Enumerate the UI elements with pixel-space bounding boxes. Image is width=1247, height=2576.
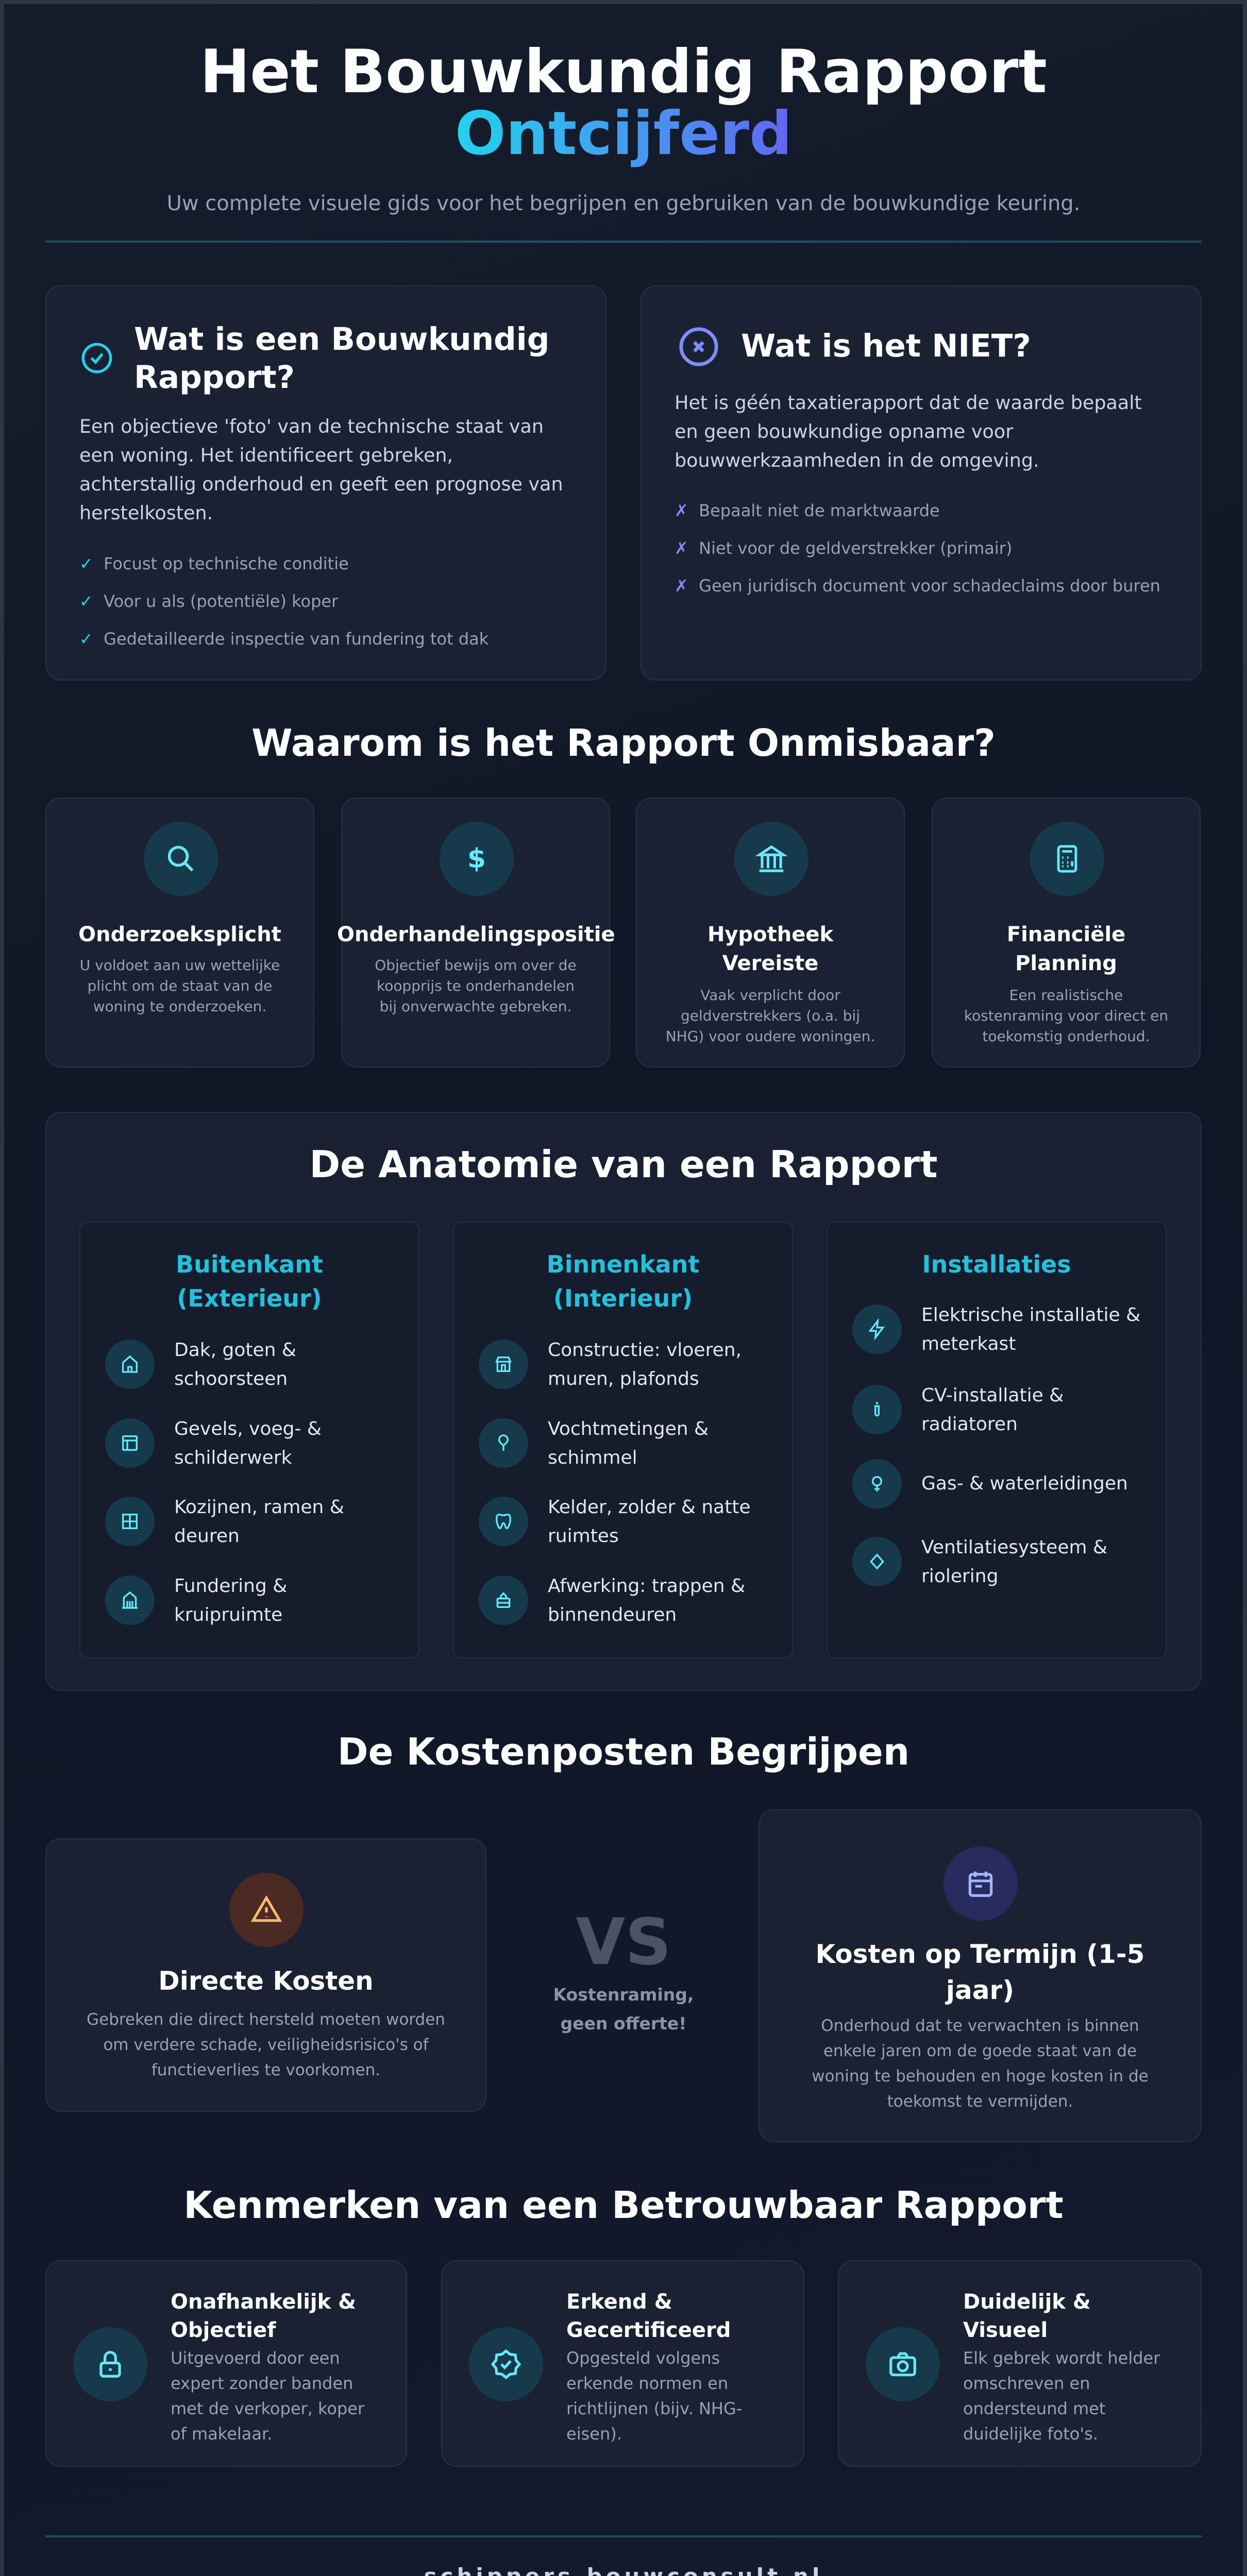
card: hypotheek: Hypotheek xyxy=(707,923,833,946)
cross list xyxy=(675,501,1160,596)
item: elektra: meterkast xyxy=(921,1333,1016,1354)
heading: kostenposten: De Kostenposten Begrijpen xyxy=(338,1730,909,1773)
body text: Een objectieve 'foto' van de technische staat van een woning. Het identificeert gebreken, achterstallig onderhoud en geeft een prognose van herstelkosten. xyxy=(79,415,563,524)
item: constructie: Constructie: vloeren, xyxy=(548,1340,742,1361)
icon: dollar: $ xyxy=(467,843,486,874)
card: financiele planning: Financiële xyxy=(1007,923,1125,946)
column: binnenkant: (Interieur) xyxy=(553,1284,693,1312)
icon: bank xyxy=(734,822,808,896)
item: gevels: Gevels, voeg- & xyxy=(174,1418,322,1439)
item: afwerking: binnendeuren xyxy=(548,1604,677,1625)
column: installaties: Installaties xyxy=(922,1250,1071,1278)
item: afwerking xyxy=(479,1575,745,1625)
card: onafhankelijk: Objectief xyxy=(171,2318,276,2342)
icon: badge check xyxy=(469,2327,543,2401)
heading: De Anatomie van een Rapport xyxy=(309,1143,938,1186)
item: dak xyxy=(105,1340,296,1389)
body text: Het is géén taxatierapport dat de waarde bepaalt en geen bouwkundige opname voor bouwwerkzaamheden in de omgeving. xyxy=(675,392,1142,471)
item: vocht: schimmel xyxy=(548,1447,637,1468)
item: kelder: ruimtes xyxy=(548,1526,619,1547)
heading: Wat is een Bouwkundig xyxy=(134,321,549,358)
cross list: ✗ Bepaalt niet de marktwaarde xyxy=(675,501,940,520)
heading: Wat is het NIET? xyxy=(741,328,1031,364)
item: kozijnen: Kozijnen, ramen & xyxy=(174,1497,344,1518)
vs callout: Kostenraming, xyxy=(553,1985,694,2005)
item: kelder xyxy=(479,1497,751,1547)
cross list: ✗ Niet voor de geldverstrekker (primair) xyxy=(675,538,1012,558)
card: financiele planning: Een realistische kostenraming voor direct en toekomstig onderhoud. xyxy=(964,987,1168,1045)
item: ventilatie: riolering xyxy=(921,1566,998,1587)
heading xyxy=(134,321,549,396)
vs callout xyxy=(553,1905,694,2033)
item: fundering xyxy=(105,1575,287,1625)
panel: wat is het niet xyxy=(641,285,1202,681)
icon: dollar xyxy=(440,822,514,896)
item: dak: Dak, goten & xyxy=(174,1340,296,1361)
item: ventilatie xyxy=(852,1537,1107,1587)
checklist: ✓ Voor u als (potentiële) koper xyxy=(79,591,338,611)
item: kozijnen: deuren xyxy=(174,1526,240,1547)
icon: camera xyxy=(866,2327,940,2401)
column: binnenkant xyxy=(453,1222,793,1658)
card: onderzoeksplicht xyxy=(45,798,314,1067)
card: hypotheek: Vaak verplicht door geldverstrekkers (o.a. bij NHG) voor oudere woningen. xyxy=(666,987,875,1045)
icon: search xyxy=(144,822,218,896)
card: onderhandelingspositie: Objectief bewijs om over de koopprijs te onderhandelen bij onverwachte gebreken. xyxy=(375,957,577,1015)
title: Ontcijferd xyxy=(455,99,792,168)
icon: calculator xyxy=(1030,822,1104,896)
subtitle: Uw complete visuele gids voor het begrijpen en gebruiken van de bouwkundige keuring. xyxy=(167,192,1080,215)
icon: x circle xyxy=(679,327,718,366)
column: buitenkant xyxy=(79,1222,419,1658)
item: gevels xyxy=(105,1418,322,1468)
panel: reasons xyxy=(45,798,1201,1067)
card: hypotheek: Vereiste xyxy=(722,952,818,975)
card: directe kosten xyxy=(45,1838,486,2112)
item: dak: schoorsteen xyxy=(174,1368,288,1389)
item: fundering: Fundering & xyxy=(174,1575,287,1597)
item: vocht: Vochtmetingen & xyxy=(548,1418,709,1439)
item: kelder: Kelder, zolder & natte xyxy=(548,1497,751,1518)
card: duidelijk: Duidelijk & xyxy=(963,2290,1091,2314)
card: onafhankelijk: Onafhankelijk & xyxy=(171,2290,356,2314)
column: buitenkant: Buitenkant xyxy=(176,1250,323,1278)
card: financiele planning: Planning xyxy=(1015,952,1117,975)
item: vocht xyxy=(479,1418,709,1468)
card: directe kosten: Gebreken die direct hersteld moeten worden om verdere schade, veiligheidsrisico's of functieverlies te voorkomen. xyxy=(87,2010,445,2079)
card: directe kosten: Directe Kosten xyxy=(158,1966,374,1996)
title xyxy=(200,37,1047,168)
item: elektra: Elektrische installatie & xyxy=(921,1304,1140,1326)
card: financiele planning xyxy=(932,798,1201,1067)
vs callout: geen offerte! xyxy=(561,2013,686,2033)
heading: Rapport? xyxy=(134,359,295,396)
item: afwerking: Afwerking: trappen & xyxy=(548,1575,745,1597)
heading: waarom: Waarom is het Rapport Onmisbaar? xyxy=(251,721,996,765)
cross list: ✗ Geen juridisch document voor schadeclaims door buren xyxy=(675,576,1160,596)
card: kosten op termijn: Onderhoud dat te verwachten is binnen enkele jaren om de goede staat van de woning te behouden en hoge kosten in de toekomst te vermijden. xyxy=(812,2016,1149,2111)
item: gas water: Gas- & waterleidingen xyxy=(921,1473,1128,1494)
item: cv: CV-installatie & xyxy=(921,1385,1064,1406)
card: erkend: Gecertificeerd xyxy=(566,2318,731,2342)
card: kosten op termijn: Kosten op Termijn (1-5 xyxy=(816,1939,1144,1969)
card: onafhankelijk: Uitgevoerd door een expert zonder banden met de verkoper, koper of makelaar. xyxy=(171,2348,364,2444)
card: duidelijk: Visueel xyxy=(963,2318,1048,2342)
item: ventilatie: Ventilatiesysteem & xyxy=(921,1537,1107,1558)
item: cv xyxy=(852,1385,1064,1435)
card: onderhandelingspositie xyxy=(341,798,610,1067)
card: duidelijk xyxy=(838,2260,1202,2467)
icon: warning xyxy=(229,1873,304,1947)
item: gevels: schilderwerk xyxy=(174,1447,292,1468)
item: kozijnen xyxy=(105,1497,344,1547)
card: erkend xyxy=(441,2260,804,2467)
heading: kenmerken: Kenmerken van een Betrouwbaar Rapport xyxy=(183,2183,1064,2227)
item: constructie: muren, plafonds xyxy=(548,1368,699,1389)
item: fundering: kruipruimte xyxy=(174,1604,282,1625)
panel: wat is het xyxy=(45,285,606,681)
card: erkend: Opgesteld volgens erkende normen en richtlijnen (bijv. NHG-eisen). xyxy=(566,2348,742,2444)
item: constructie xyxy=(479,1340,742,1389)
card: erkend: Erkend & xyxy=(566,2290,672,2314)
card: kosten op termijn: jaar) xyxy=(946,1975,1014,2005)
card: onderzoeksplicht: Onderzoeksplicht xyxy=(78,923,281,946)
column: buitenkant: (Exterieur) xyxy=(177,1284,322,1312)
item: cv: radiatoren xyxy=(921,1414,1018,1435)
card: hypotheek xyxy=(636,798,905,1067)
checklist: ✓ Gedetailleerde inspectie van fundering tot dak xyxy=(79,629,488,649)
vs callout: VS xyxy=(576,1905,671,1979)
icon: calendar xyxy=(943,1846,1018,1921)
checklist: ✓ Focust op technische conditie xyxy=(79,554,349,573)
item: elektra xyxy=(852,1304,1140,1354)
panel: anatomie xyxy=(45,1112,1202,1691)
card: onderzoeksplicht: U voldoet aan uw wettelijke plicht om de staat van de woning te onderzoeken. xyxy=(80,957,280,1015)
card: onafhankelijk xyxy=(45,2260,407,2467)
checklist xyxy=(79,554,488,649)
title: Het Bouwkundig Rapport xyxy=(200,37,1047,107)
icon: check circle xyxy=(81,343,112,373)
icon: lock xyxy=(73,2327,147,2401)
card: onderhandelingspositie: Onderhandelingspositie xyxy=(337,923,615,946)
item: gas water xyxy=(852,1459,1128,1509)
column: binnenkant: Binnenkant xyxy=(547,1250,699,1278)
card: duidelijk: Elk gebrek wordt helder omschreven en ondersteund met duidelijke foto's. xyxy=(963,2348,1160,2444)
column: installaties xyxy=(827,1222,1167,1658)
card: kosten op termijn xyxy=(759,1809,1202,2142)
